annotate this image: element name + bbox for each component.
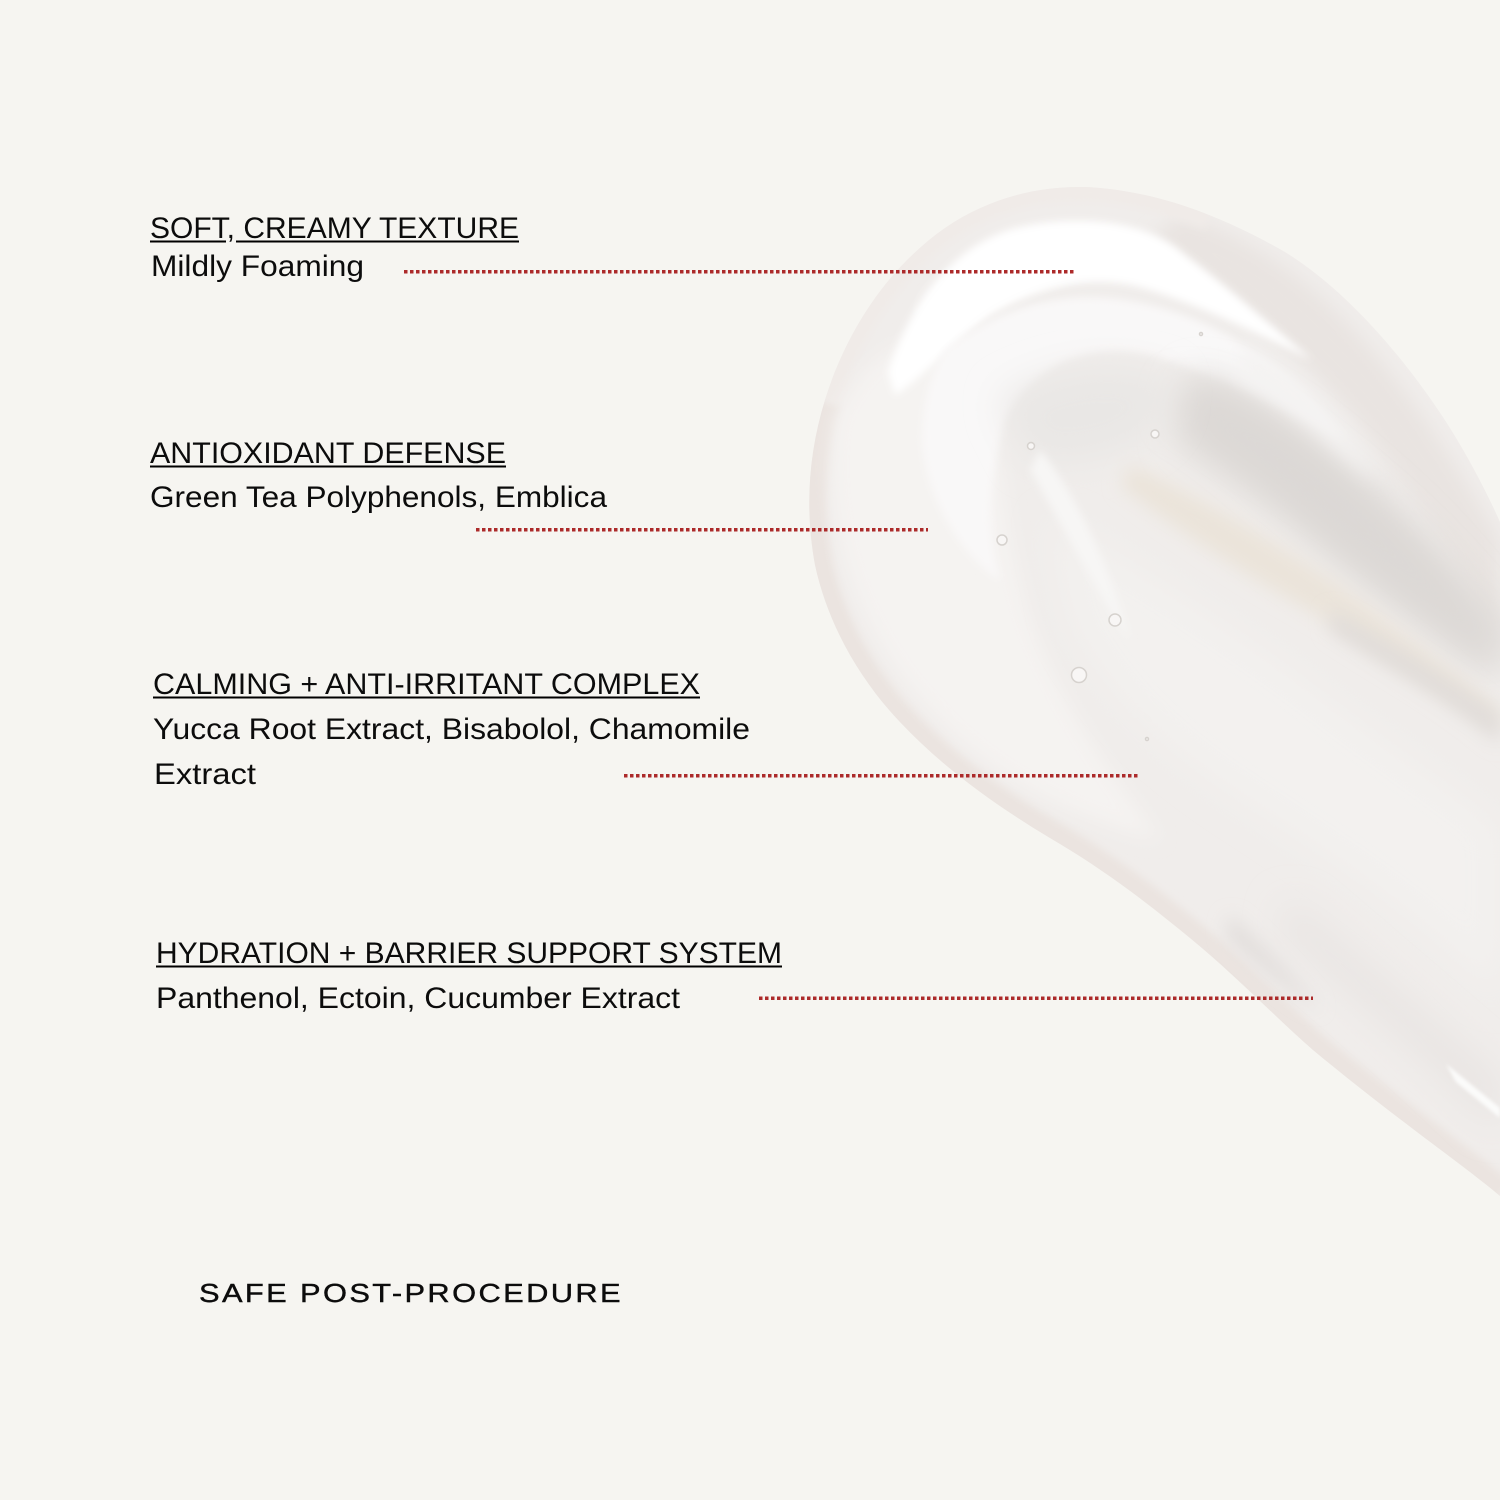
text: mildly foaming: Mildly Foaming [151,250,364,283]
heading: calming complex: CALMING + ANTI-IRRITANT COMPLEX [153,668,700,701]
cream swatch [800,180,1500,1200]
text: panthenol list: Panthenol, Ectoin, Cucumber Extract [156,982,681,1015]
infographic canvas [150,187,1500,1302]
footer label: SAFE POST-PROCEDURE [199,1278,623,1308]
grey shadow bands [1175,375,1500,680]
outer rim tone [809,400,1500,1196]
pearly left swirl [960,299,1242,446]
upper right darker rim [1170,227,1492,584]
soft lower folds [1034,456,1085,538]
air bubbles [997,332,1202,740]
dotted leader 1 [404,270,1074,273]
heading: antioxidant defense: ANTIOXIDANT DEFENSE [150,437,506,470]
left pale body [832,337,1160,840]
text: yucca root list [153,713,750,791]
text: yucca root list: Extract [154,758,257,791]
mid soft area [1050,520,1500,1000]
bright band above shadow [1331,438,1344,448]
dotted leader 3 [624,774,1138,777]
grey right edge below beige [1338,625,1496,732]
main highlight [888,221,1312,395]
heading: soft, creamy texture: SOFT, CREAMY TEXTURE [150,212,519,245]
heading: hydration system: HYDRATION + BARRIER SUPPORT SYSTEM [156,937,782,970]
text: yucca root list: Yucca Root Extract, Bisabolol, Chamomile [153,713,750,746]
dotted leader 2 [476,528,928,531]
warm beige band [1126,470,1437,668]
text: green tea polyphenols: Green Tea Polyphenols, Emblica [150,481,607,514]
dotted leader 4 [759,996,1313,1000]
